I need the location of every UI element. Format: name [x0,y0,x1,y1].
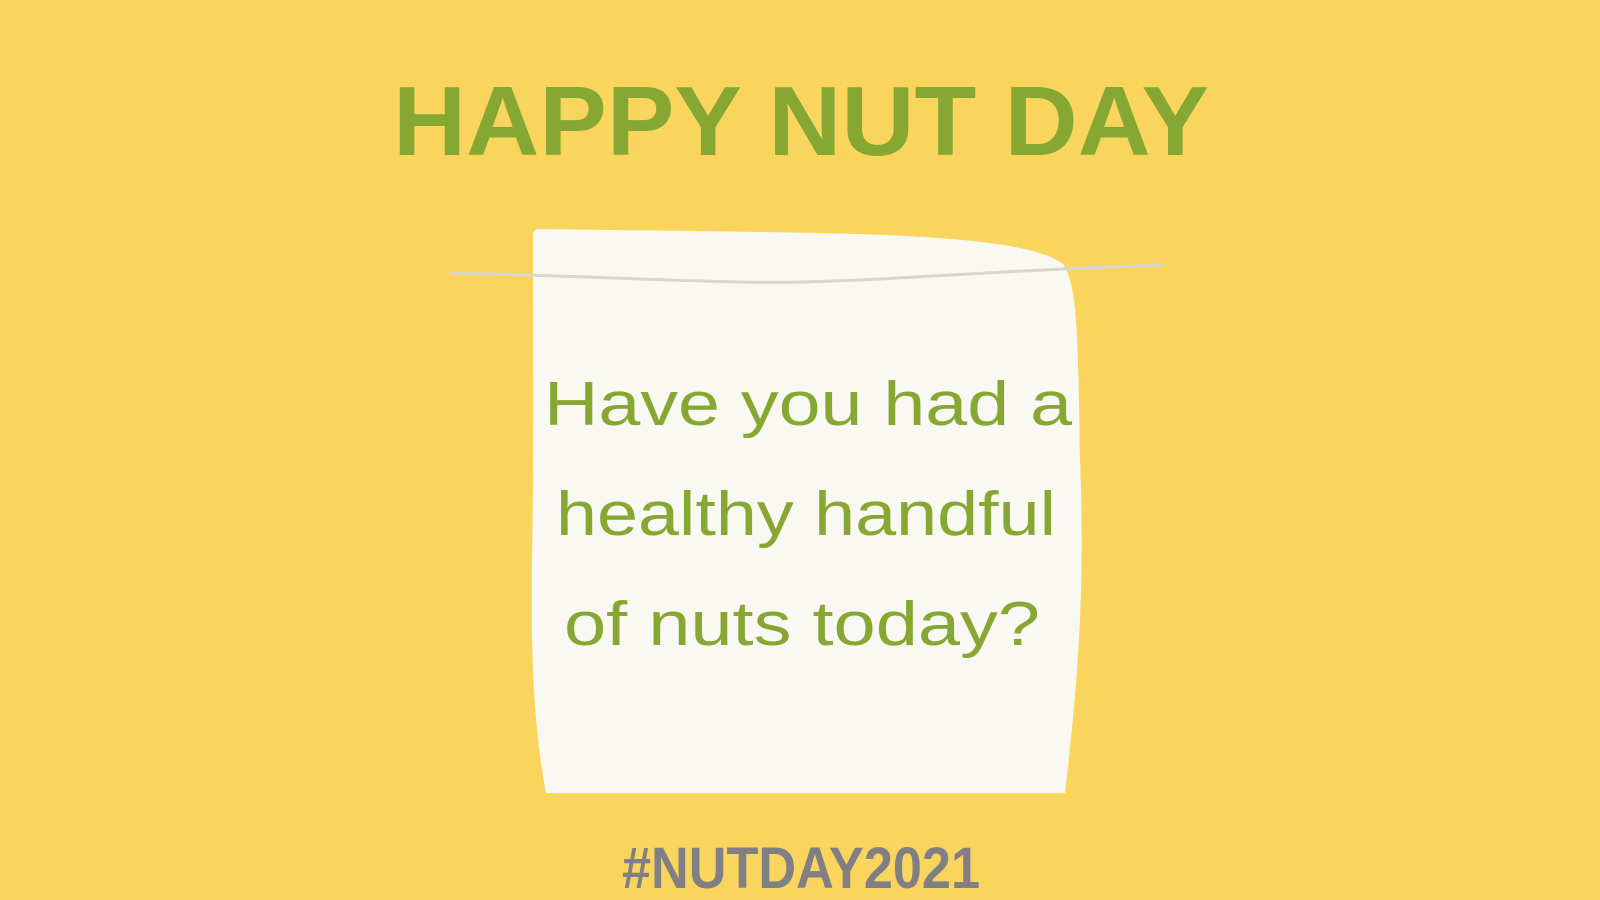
hanging line [450,265,1163,282]
note card [450,229,1163,793]
question text: healthy handful [556,480,1056,549]
question text: Have you had a [544,370,1073,439]
title: HAPPY NUT DAY [393,66,1209,176]
hashtag: #NUTDAY2021 [622,836,980,900]
question text: of nuts today? [564,590,1040,659]
paper [532,229,1082,793]
question text [544,370,1073,659]
